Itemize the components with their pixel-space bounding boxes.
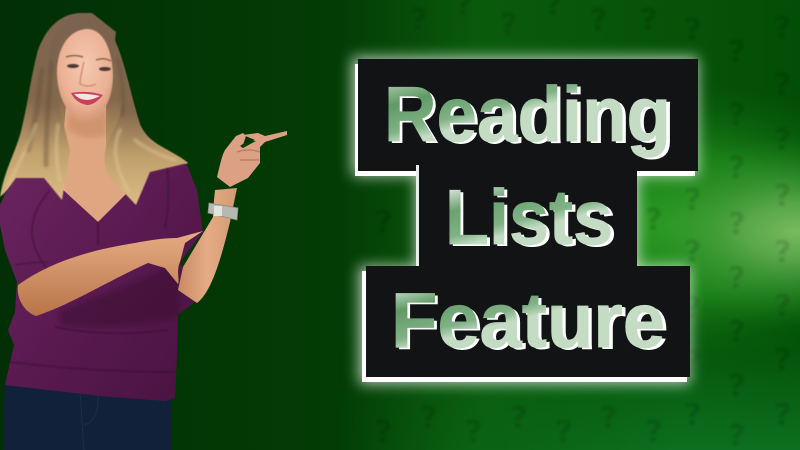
question mark pattern: ? <box>590 3 607 38</box>
brows <box>66 56 111 61</box>
question mark pattern: ? <box>728 369 745 404</box>
face <box>57 29 113 120</box>
question mark pattern: ? <box>774 343 791 378</box>
right arm <box>178 188 237 303</box>
question mark pattern: ? <box>774 11 791 46</box>
question mark pattern: ? <box>728 151 745 186</box>
question mark pattern: ? <box>510 401 527 436</box>
question mark pattern: ? <box>410 3 427 38</box>
box: Lists: Lists <box>448 175 617 263</box>
box: Feature <box>362 266 690 382</box>
box: Reading <box>355 59 698 176</box>
jeans seams <box>80 392 98 450</box>
question mark pattern: ? <box>774 235 791 270</box>
raised hand <box>217 131 287 187</box>
question mark pattern: ? <box>728 315 745 350</box>
question mark pattern: ? <box>684 73 701 108</box>
box: Feature: Feature <box>394 278 669 366</box>
question mark pattern: ? <box>774 289 791 324</box>
question mark pattern: ? <box>375 415 392 450</box>
smile <box>71 92 103 105</box>
forearm and pointing hand <box>18 231 203 316</box>
box: Reading: Reading <box>384 70 671 158</box>
question mark pattern: ? <box>375 205 392 240</box>
question mark pattern <box>375 0 791 450</box>
question mark pattern: ? <box>645 203 662 238</box>
box: Reading: Reading <box>387 72 675 160</box>
question mark pattern: ? <box>774 68 791 103</box>
hair left strands <box>2 28 70 200</box>
watch buckle <box>214 206 222 216</box>
neck and chest <box>52 105 135 222</box>
question mark pattern: ? <box>728 207 745 242</box>
nose <box>80 62 96 86</box>
hand shadow <box>237 150 260 160</box>
box: Feature: Feature <box>391 276 665 364</box>
shirt folds <box>10 154 175 372</box>
hair back <box>0 13 188 205</box>
question mark pattern: ? <box>465 415 482 450</box>
question mark pattern: ? <box>684 291 701 326</box>
question mark pattern: ? <box>600 401 617 436</box>
eyes <box>67 64 111 71</box>
question mark pattern: ? <box>774 398 791 433</box>
hand gap <box>240 141 256 148</box>
question mark pattern: ? <box>684 183 701 218</box>
question mark pattern: ? <box>728 98 745 133</box>
question mark pattern: ? <box>728 35 745 70</box>
question mark pattern: ? <box>640 3 657 38</box>
jeans <box>3 380 172 450</box>
shirt shadow under arm <box>60 262 180 326</box>
question mark pattern: ? <box>555 415 572 450</box>
neck shadow <box>68 108 108 138</box>
question mark pattern: ? <box>684 345 701 380</box>
watch <box>208 203 238 220</box>
question mark pattern: ? <box>684 235 701 270</box>
title glow <box>352 57 698 384</box>
question mark pattern: ? <box>728 261 745 296</box>
hair right strands <box>104 35 188 205</box>
question mark pattern: ? <box>684 398 701 433</box>
question mark pattern: ? <box>774 123 791 158</box>
shirt <box>0 154 203 401</box>
question mark pattern: ? <box>684 13 701 48</box>
box: Lists: Lists <box>445 173 613 261</box>
question mark pattern: ? <box>500 8 517 43</box>
title: Reading Lists Feature <box>355 59 698 382</box>
hair streaks <box>8 60 175 190</box>
question mark pattern: ? <box>774 179 791 214</box>
question mark pattern: ? <box>420 401 437 436</box>
woman pointing <box>0 13 287 450</box>
question mark pattern: ? <box>645 415 662 450</box>
hair top <box>48 13 116 68</box>
